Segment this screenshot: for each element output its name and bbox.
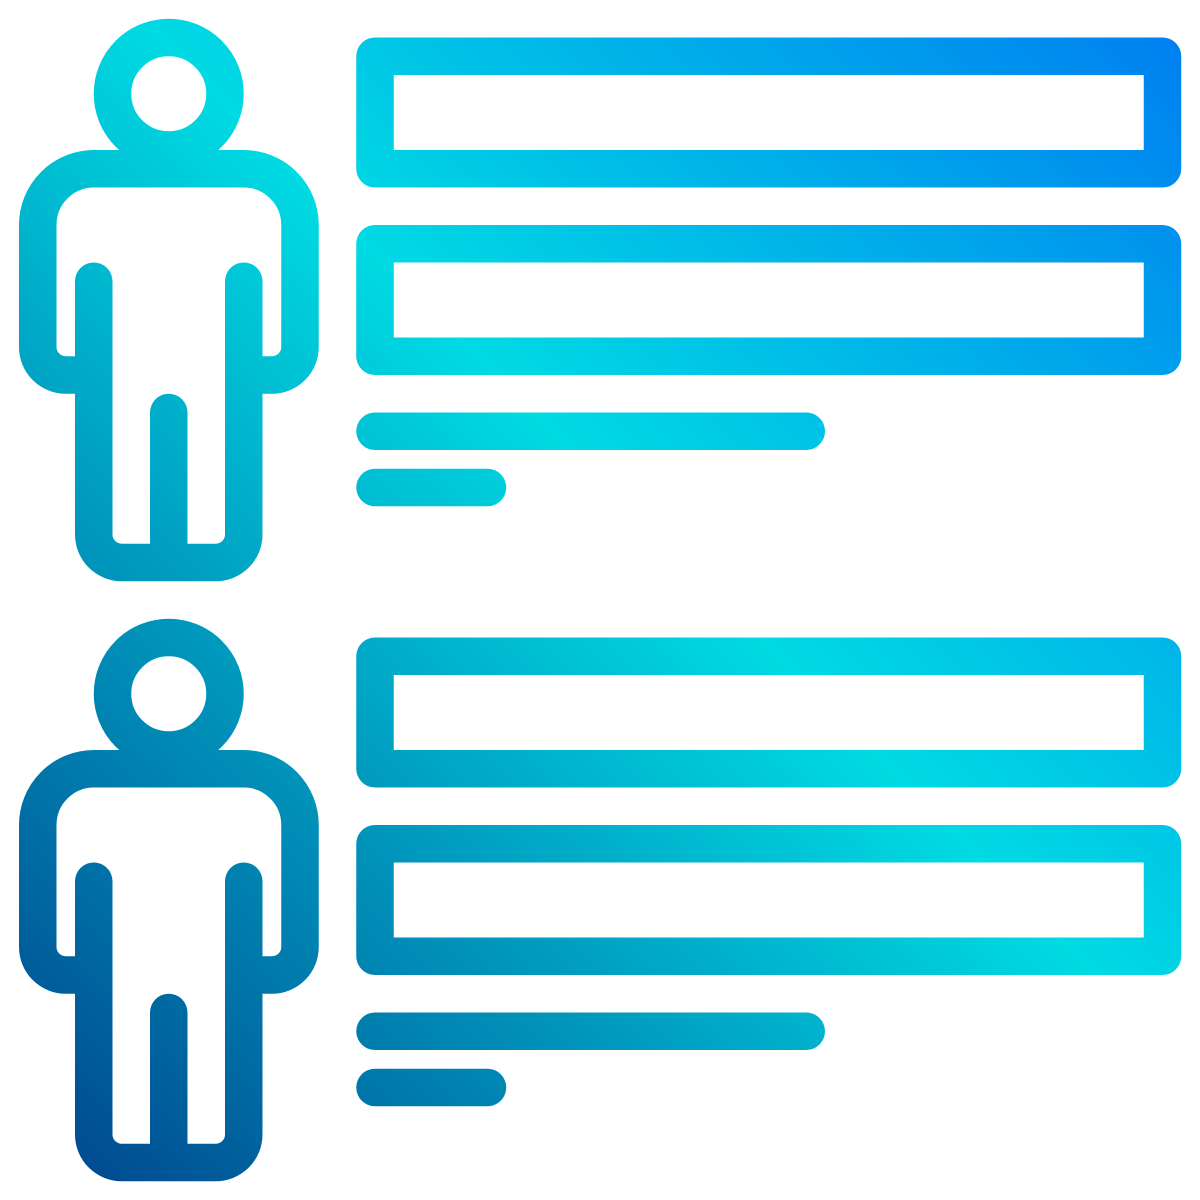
top field 2 bbox=[375, 244, 1162, 356]
person head bbox=[112, 38, 225, 150]
bottom long text line bbox=[375, 1012, 806, 1050]
person legs bbox=[94, 281, 244, 562]
top row bbox=[38, 38, 1162, 562]
person leg divider bbox=[150, 412, 188, 550]
person legs bbox=[94, 881, 244, 1162]
person torso and arms bbox=[38, 769, 300, 975]
bottom row bbox=[38, 638, 1162, 1162]
top field 1 bbox=[375, 56, 1162, 169]
top long text line bbox=[375, 412, 806, 450]
top short text line bbox=[375, 469, 488, 506]
person torso and arms bbox=[38, 169, 300, 375]
person leg divider bbox=[150, 1012, 188, 1150]
bottom short text line bbox=[375, 1069, 488, 1106]
person head bbox=[112, 638, 225, 750]
bottom field 1 bbox=[375, 656, 1162, 769]
icon: bottom person bbox=[38, 638, 300, 1162]
icon: top person bbox=[38, 38, 300, 562]
bottom field 2 bbox=[375, 844, 1162, 956]
